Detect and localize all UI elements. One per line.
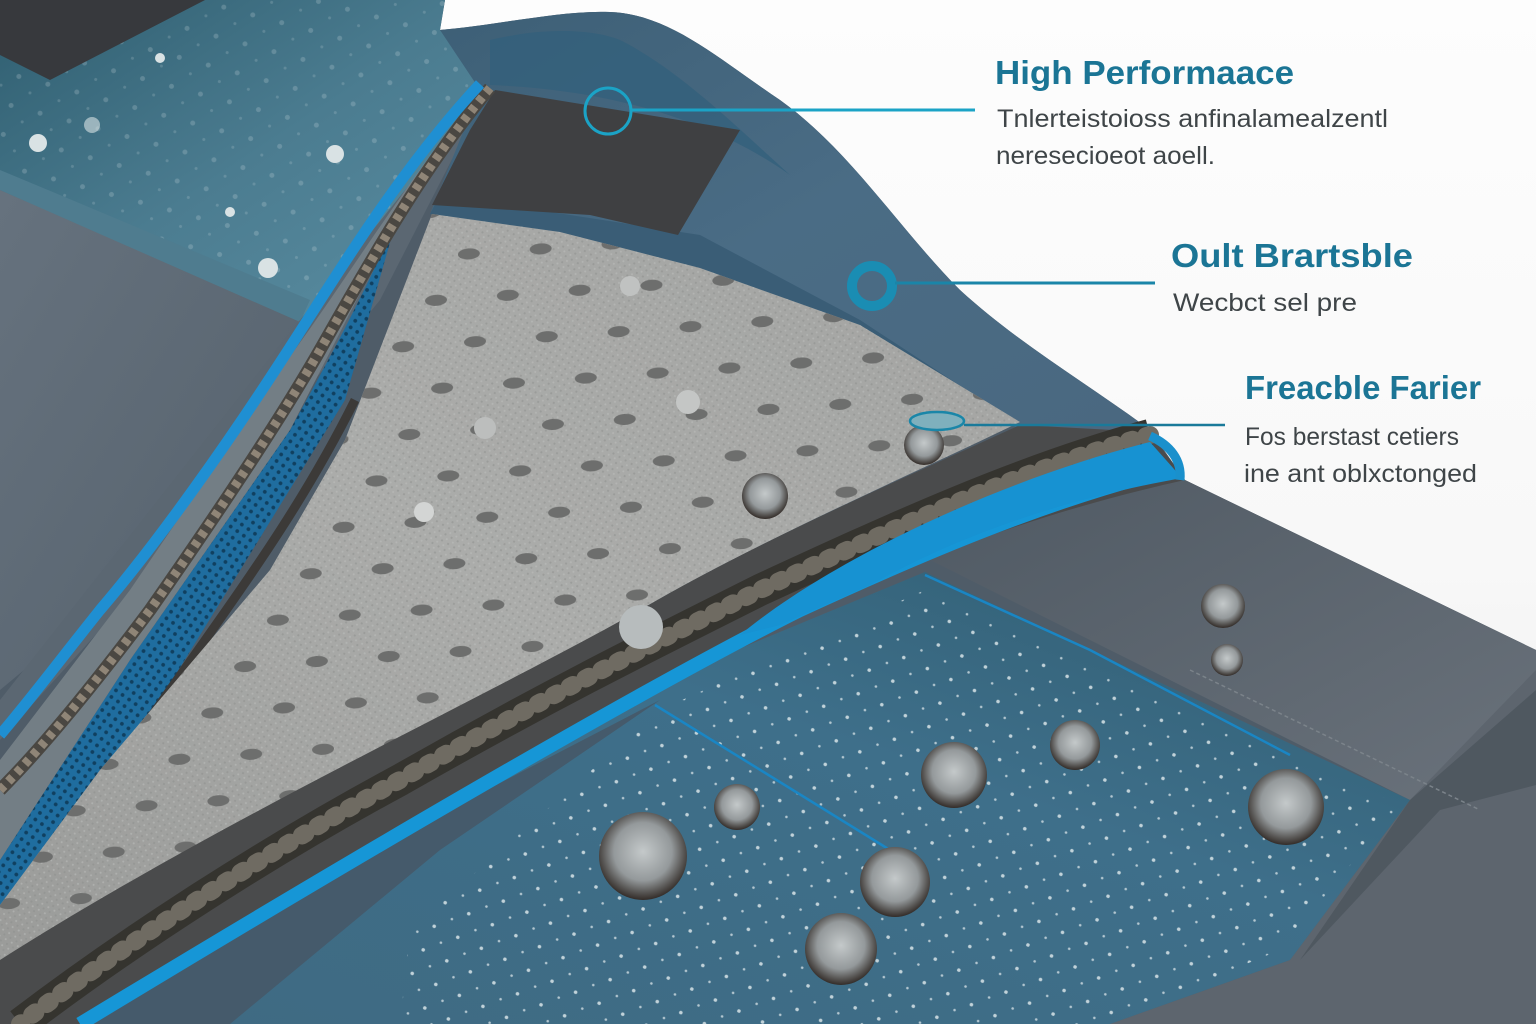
description: [996, 105, 1388, 170]
panel: upper-left shoulder: [0, 0, 490, 740]
heading: Oult Brartsble: [1171, 237, 1413, 274]
icon: droplets on lower fabric: [599, 584, 1324, 985]
panel: lower blue fabric: [70, 572, 1410, 1024]
callout: freacble farier: [910, 369, 1481, 488]
panel: hood lining: [430, 12, 1150, 430]
callout: oult brartsble: [852, 237, 1413, 317]
callout: high performance: [585, 54, 1388, 170]
icon: droplets on shoulder: [29, 53, 344, 278]
panel: perforated mesh: [0, 200, 1040, 1000]
description: Tnlerteistoioss anfinalamealzentl: [997, 105, 1388, 133]
marker ring: [585, 88, 631, 134]
heading: Freacble Farier: [1245, 369, 1481, 406]
heading: High Performaace: [995, 54, 1294, 91]
marker: [910, 412, 964, 430]
icon: blue threads: [655, 575, 1290, 850]
leader line: [631, 108, 975, 112]
panel: inner dark mesh: [432, 90, 740, 235]
marker ring: [852, 266, 892, 306]
description: [1244, 423, 1477, 488]
description: neresecioeot aoell.: [996, 142, 1215, 170]
leader line: [895, 282, 1155, 284]
description: ine ant oblxctonged: [1244, 460, 1477, 488]
description: Wecbct sel pre: [1173, 289, 1357, 317]
description: Fos berstast cetiers: [1245, 423, 1459, 451]
panel: right sleeve: [930, 470, 1536, 1024]
panel: left zipper and piping: [0, 84, 490, 960]
panel: lower zipper and piping: [0, 425, 1185, 1024]
icon: droplets on mesh: [414, 276, 944, 649]
leader line: [964, 424, 1225, 426]
